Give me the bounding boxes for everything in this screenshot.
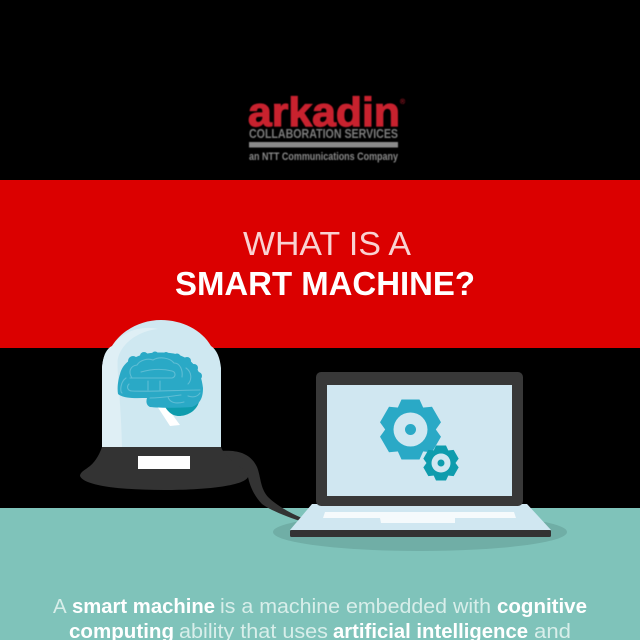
- title: SMART MACHINE?: [175, 265, 475, 302]
- logo: arkadin: ®: [400, 98, 406, 106]
- text block: definition: smart machine: [72, 595, 215, 618]
- laptop bottom edge: [290, 530, 551, 537]
- illustration: laptop: [290, 372, 551, 537]
- laptop screen: [327, 385, 512, 496]
- laptop lid: [316, 372, 523, 506]
- text block: definition: cognitive: [497, 595, 587, 618]
- logo: arkadin: an NTT Communications Company: [249, 151, 399, 163]
- text block: definition: is a machine embedded with: [220, 595, 491, 618]
- logo: arkadin: [248, 89, 406, 163]
- icon: large gear: [378, 400, 443, 460]
- illustration: cable: [221, 451, 302, 521]
- brain stem: [157, 406, 180, 426]
- illustration: glass dome with brain: [80, 320, 248, 490]
- brain cerebellum: [163, 402, 199, 416]
- text block: definition: [53, 595, 587, 640]
- panel: red title band: [0, 180, 640, 348]
- illustration: laptop shadow: [273, 513, 567, 551]
- logo: arkadin: arkadin: [248, 89, 400, 135]
- keyboard: [323, 512, 516, 523]
- icon: brain: [118, 352, 203, 408]
- panel: teal lower section: [0, 508, 640, 640]
- text block: definition: A: [53, 595, 67, 618]
- title: WHAT IS A: [243, 225, 411, 262]
- dome base: [80, 447, 248, 490]
- laptop base: [290, 504, 551, 530]
- logo: arkadin: COLLABORATION SERVICES: [249, 127, 398, 141]
- icon: small gear: [422, 446, 460, 480]
- dome highlight: [102, 328, 158, 447]
- title: [175, 225, 475, 302]
- glass dome: [102, 320, 221, 447]
